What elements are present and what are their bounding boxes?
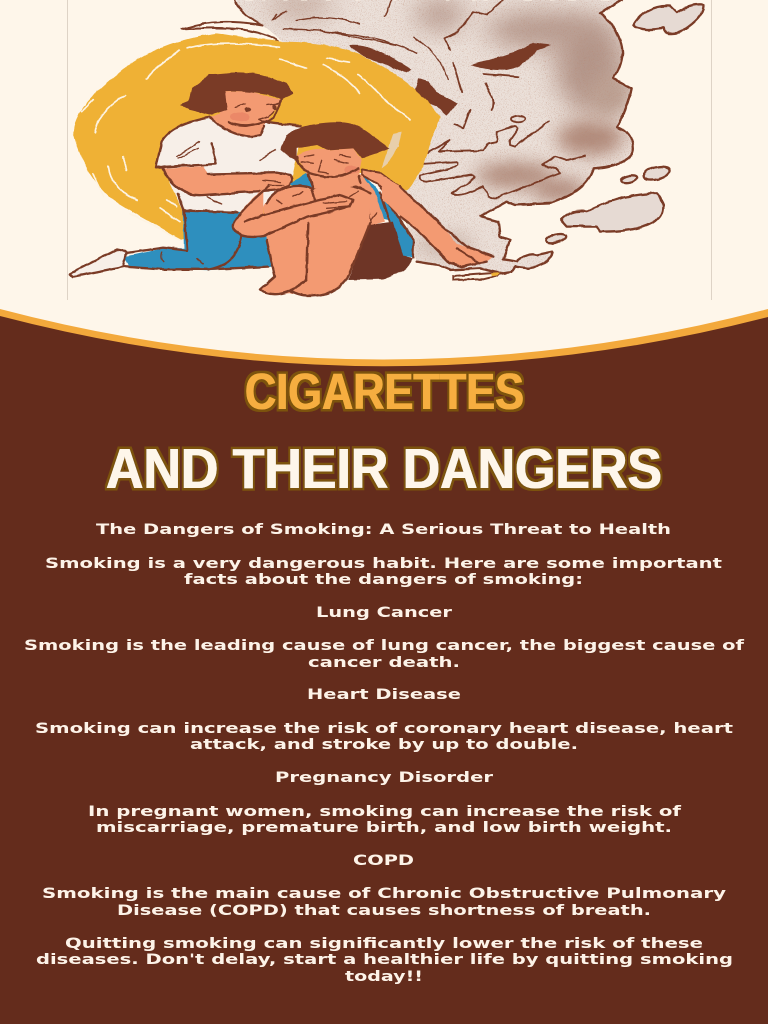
hair xyxy=(281,122,390,160)
neck and face xyxy=(297,148,362,188)
title: cigarettes: CIGARETTES xyxy=(245,363,524,420)
closing call to action: today!! xyxy=(345,969,423,985)
copd text: Disease (COPD) that causes shortness of breath. xyxy=(117,903,651,919)
intro paragraph xyxy=(45,556,722,588)
left frame line xyxy=(67,0,68,300)
heart disease text: attack, and stroke by up to double. xyxy=(190,737,578,753)
shorts xyxy=(348,222,413,280)
shirt xyxy=(156,117,301,212)
smoke eye left xyxy=(414,78,457,116)
intro paragraph: Smoking is a very dangerous habit. Here are some important xyxy=(45,556,722,572)
pregnancy disorder heading: Pregnancy Disorder xyxy=(275,770,494,786)
arm reaching to cigarette xyxy=(380,173,493,267)
legs xyxy=(259,184,370,296)
brown lower panel with orange curved edge xyxy=(0,309,768,1024)
lung cancer text: Smoking is the leading cause of lung cancer, the biggest cause of xyxy=(24,638,745,654)
arm xyxy=(163,166,292,195)
cigarette xyxy=(453,273,500,280)
pregnancy disorder text: In pregnant women, smoking can increase the risk of xyxy=(88,804,682,820)
closing call to action: diseases. Don't delay, start a healthier life by quitting smoking xyxy=(36,952,733,968)
pregnancy disorder text: miscarriage, premature birth, and low birth weight. xyxy=(96,820,672,836)
older child figure xyxy=(70,72,301,277)
floating smoke puffs xyxy=(545,5,703,245)
smoke wisps xyxy=(182,0,448,80)
tank top xyxy=(290,173,413,257)
intro heading: The Dangers of Smoking: A Serious Threat to Health xyxy=(96,522,671,538)
forearm around knees xyxy=(233,188,353,237)
lung cancer heading: Lung Cancer xyxy=(316,605,453,621)
heart disease text xyxy=(35,721,733,753)
smoke eye xyxy=(470,43,552,70)
hand on shoulder xyxy=(362,169,400,192)
closing call to action: Quitting smoking can significantly lower the risk of these xyxy=(65,936,703,952)
trousers xyxy=(125,210,280,271)
copd heading: COPD xyxy=(353,853,414,869)
sock xyxy=(70,250,127,277)
illustration: smoke and two figures xyxy=(70,0,703,296)
copd text xyxy=(42,886,727,919)
closing call to action xyxy=(36,936,733,985)
yellow glow xyxy=(73,33,440,240)
dark smoke patch xyxy=(350,45,412,73)
intro paragraph: facts about the dangers of smoking: xyxy=(184,572,583,588)
neck and head xyxy=(210,92,282,136)
smoke cloud xyxy=(182,0,640,280)
lung cancer text: cancer death. xyxy=(308,655,460,671)
hair xyxy=(180,72,293,115)
face xyxy=(235,103,280,122)
lung cancer text xyxy=(24,638,745,671)
body text xyxy=(24,522,745,985)
right frame line xyxy=(711,0,712,300)
title: and their dangers: AND THEIR DANGERS xyxy=(106,437,662,501)
pregnancy disorder text xyxy=(88,804,682,836)
smoke swirls xyxy=(406,0,585,198)
heart disease heading: Heart Disease xyxy=(307,687,461,703)
copd text: Smoking is the main cause of Chronic Obstructive Pulmonary xyxy=(42,886,727,902)
heart disease text: Smoking can increase the risk of coronary heart disease, heart xyxy=(35,721,733,737)
younger child figure xyxy=(233,122,414,296)
torso xyxy=(308,173,385,226)
